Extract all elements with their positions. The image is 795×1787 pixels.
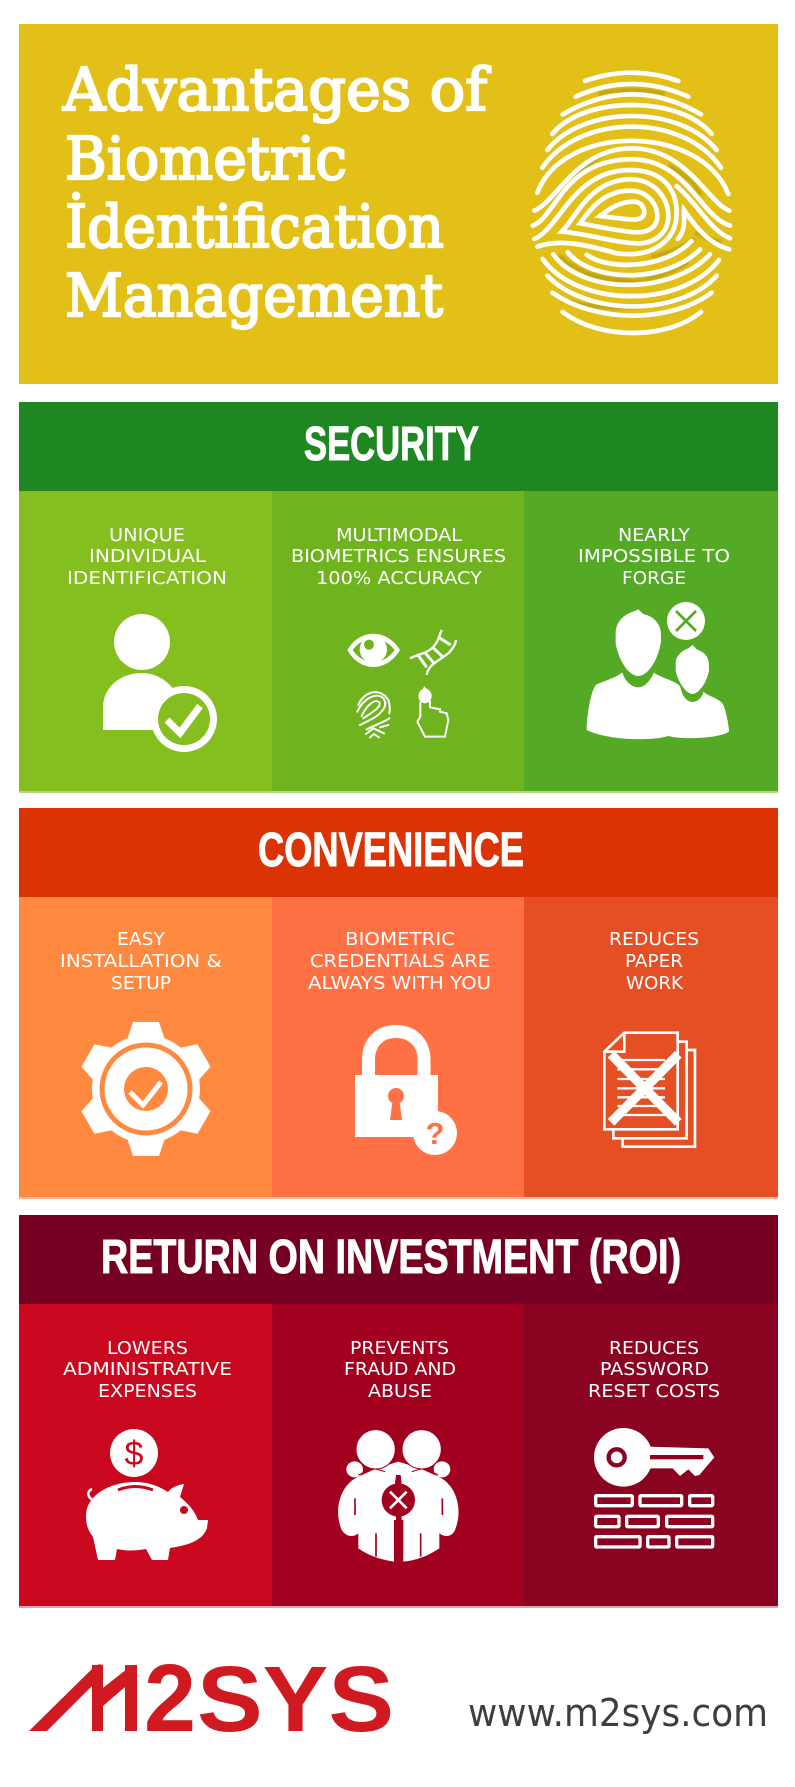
icon: piggy bank with coin	[86, 1429, 208, 1560]
text: card label: SETUP	[111, 973, 171, 994]
icon: touch hand	[417, 686, 448, 737]
text: card label: CREDENTIALS ARE	[310, 951, 490, 972]
website url: www.m2sys.com	[468, 1691, 768, 1735]
text: card label: BIOMETRIC	[345, 929, 455, 950]
heading: return on investment	[19, 1215, 778, 1304]
logo: M2SYS: M	[88, 1645, 140, 1752]
card: reduces paper work	[524, 897, 778, 1197]
card: multimodal biometrics	[272, 491, 524, 791]
icon: two people with cross	[587, 602, 729, 739]
text: card label	[588, 1338, 720, 1402]
text: card label: ABUSE	[368, 1381, 432, 1402]
card: prevents fraud and abuse	[272, 1304, 524, 1606]
icon: two people with cross	[338, 1430, 459, 1562]
text: card label: LOWERS	[107, 1338, 188, 1359]
heading: convenience: CONVENIENCE	[258, 824, 524, 877]
text: card label: NEARLY	[618, 525, 691, 546]
icon: person with check	[103, 614, 217, 752]
text: card label: IDENTIFICATION	[67, 568, 227, 589]
text: card label	[60, 929, 222, 994]
text: card label: 100% ACCURACY	[316, 568, 483, 589]
text: card label: INSTALLATION &	[60, 951, 222, 972]
text: card label: ALWAYS WITH YOU	[308, 973, 491, 994]
text: card label: REDUCES	[609, 1338, 699, 1359]
text: card label: FRAUD AND	[344, 1359, 456, 1380]
text: card label	[578, 525, 730, 589]
logo: M2SYS: 2	[144, 1645, 196, 1752]
icon: padlock with question mark: ?	[426, 1116, 444, 1151]
card: unique individual identification	[19, 491, 272, 791]
text: card label	[344, 1338, 456, 1402]
card: reduces password reset costs	[524, 1304, 778, 1606]
text: card label: EXPENSES	[98, 1381, 197, 1402]
text: card label	[291, 525, 506, 589]
panel: title banner	[19, 24, 778, 384]
text: card label: ADMINISTRATIVE	[63, 1359, 232, 1380]
text: card label: WORK	[626, 973, 684, 994]
icon: fingerprint	[533, 73, 730, 333]
text: card label: INDIVIDUAL	[89, 546, 206, 567]
card: lowers administrative expenses	[19, 1304, 272, 1606]
title: Management	[65, 261, 443, 330]
icon: eye	[347, 634, 400, 667]
text: card label: PREVENTS	[350, 1338, 449, 1359]
card: credentials always with you	[272, 897, 524, 1197]
text: card label: FORGE	[622, 568, 686, 589]
icon: key and password bricks	[594, 1428, 714, 1547]
title: Biometric	[65, 124, 347, 193]
panel: return on investment	[19, 1215, 778, 1608]
text: card label: PAPER	[625, 951, 683, 972]
text: card label: UNIQUE	[109, 525, 185, 546]
icon: biometric modalities	[347, 630, 456, 737]
panel: convenience	[19, 808, 778, 1199]
text: card label	[63, 1338, 232, 1402]
title: Advantages of	[62, 55, 491, 124]
icon: key	[594, 1428, 714, 1487]
text: card label: RESET COSTS	[588, 1381, 720, 1402]
icon: dna helix	[410, 630, 456, 675]
text: card label: EASY	[117, 929, 166, 950]
title: İdentification	[65, 192, 444, 261]
icon: password bricks	[596, 1496, 713, 1547]
text: card label: MULTIMODAL	[336, 525, 462, 546]
text: card label: PASSWORD	[600, 1359, 709, 1380]
text: card label	[609, 929, 699, 994]
icon: padlock with question mark	[355, 1032, 457, 1155]
title	[62, 55, 491, 330]
icon: small fingerprint	[357, 692, 390, 737]
icon: piggy bank with coin: $	[125, 1435, 144, 1473]
logo: M2SYS	[29, 1645, 394, 1752]
logo: M2SYS: SYS	[197, 1647, 394, 1751]
heading: convenience	[19, 808, 778, 897]
card: nearly impossible to forge	[524, 491, 778, 791]
text: card label: IMPOSSIBLE TO	[578, 546, 730, 567]
heading: security: SECURITY	[304, 418, 479, 471]
icon: crossed-out papers	[604, 1033, 695, 1147]
text: card label: BIOMETRICS ENSURES	[291, 546, 506, 567]
text: card label	[67, 525, 227, 589]
card: easy installation	[19, 897, 272, 1197]
icon: gear with check	[78, 1022, 214, 1156]
text: card label	[308, 929, 491, 994]
heading: security	[19, 402, 778, 491]
text: card label: REDUCES	[609, 929, 699, 950]
panel: security	[19, 402, 778, 793]
